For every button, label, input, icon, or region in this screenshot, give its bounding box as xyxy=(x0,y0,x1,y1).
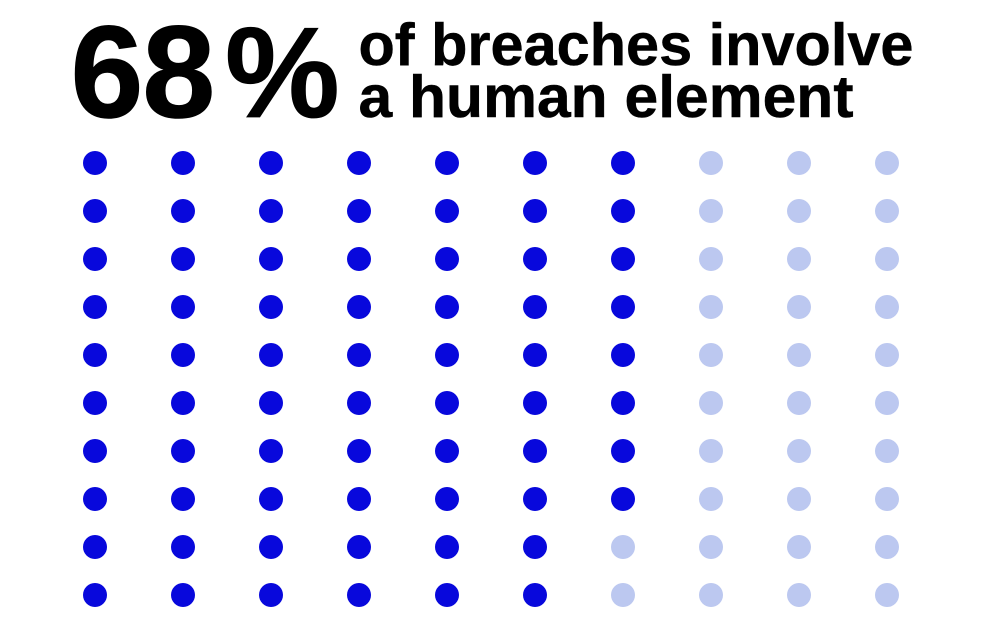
heading: 68% statistic xyxy=(70,0,340,145)
filled dots: 68 xyxy=(83,151,635,607)
heading: of breaches involve a human element: of breaches involve xyxy=(358,12,914,78)
heading: 68% statistic: % xyxy=(225,1,340,145)
dot matrix chart: 68 of 100 dots filled xyxy=(83,151,899,607)
unfilled dots: 32 xyxy=(611,151,899,607)
heading: 68% statistic: 68 xyxy=(70,0,214,145)
heading: of breaches involve a human element xyxy=(358,12,914,130)
heading: of breaches involve a human element: a human element xyxy=(358,64,854,130)
